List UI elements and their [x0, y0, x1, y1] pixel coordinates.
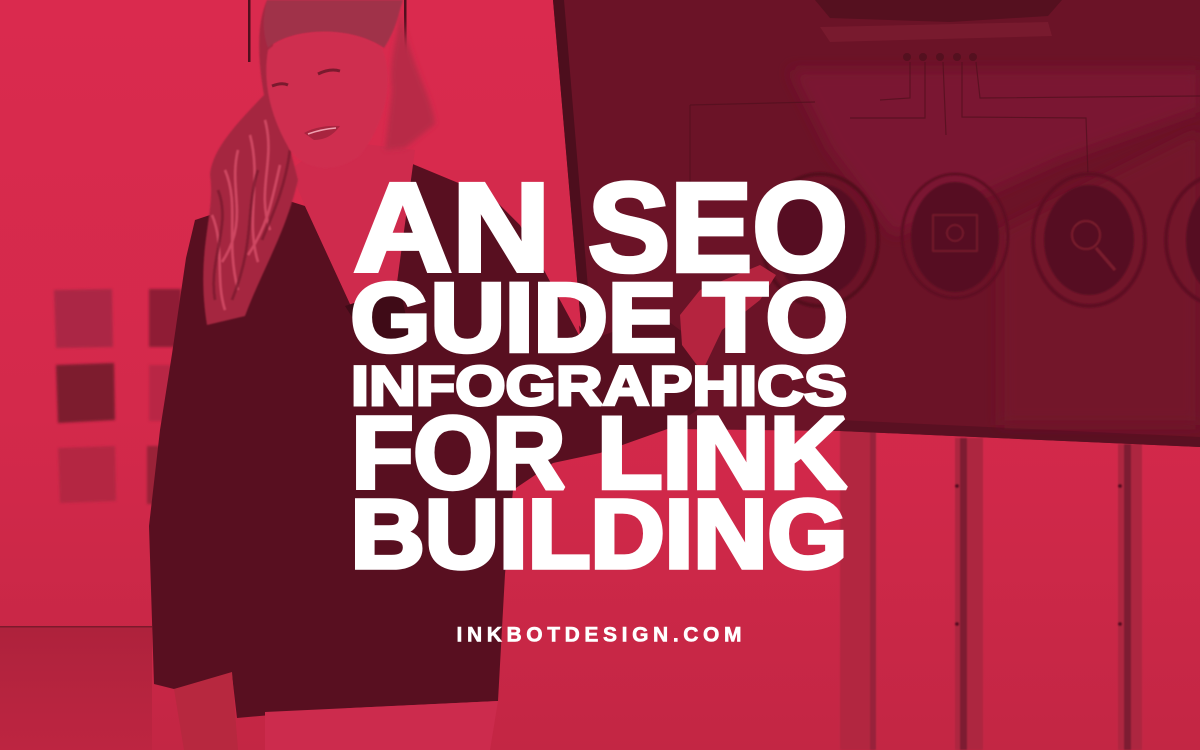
display screen — [553, 0, 1200, 447]
title line: AN SEO — [354, 157, 848, 298]
title line: GUIDE TO: GUIDE — [350, 263, 676, 372]
title — [350, 157, 848, 588]
screen circle icon 4 — [1166, 174, 1200, 306]
display stand legs — [840, 430, 1142, 750]
presenter hair — [203, 0, 435, 325]
title line: GUIDE TO: TO — [703, 263, 848, 372]
presenter neckline — [290, 140, 415, 306]
screen circle icon 2 — [902, 174, 1008, 298]
title line: FOR LINK: FOR — [352, 396, 566, 510]
screen circle icon 3 — [1033, 174, 1145, 306]
website credit: INKBOTDESIGN.COM — [456, 624, 742, 646]
screen connector dots — [903, 53, 977, 61]
title line: INFOGRAPHICS: INFOGRAPHICS — [351, 354, 847, 417]
title line: AN SEO: SEO — [588, 157, 848, 298]
screen circle icon 1 — [762, 174, 878, 306]
title line: GUIDE TO — [350, 263, 848, 372]
dark frame behind the presenter — [248, 0, 406, 62]
presenter face — [266, 32, 388, 168]
bright wall between arm and screen — [433, 170, 580, 337]
screen connector lines — [690, 62, 1200, 190]
title line: BUILDING: BUILDING — [350, 479, 848, 588]
screen lighter light wedge — [790, 70, 1200, 235]
presenter jacket and arm — [149, 160, 707, 718]
presenter pointing hand — [680, 265, 776, 372]
title line: FOR LINK — [352, 396, 847, 510]
wall colour swatches — [54, 289, 181, 504]
presenter hand — [174, 672, 238, 750]
title line: FOR LINK: LINK — [597, 396, 847, 510]
presenter — [149, 0, 776, 750]
screen top dark shape — [815, 0, 1062, 22]
title line: AN SEO: AN — [354, 157, 550, 298]
presenter trousers — [265, 701, 498, 750]
